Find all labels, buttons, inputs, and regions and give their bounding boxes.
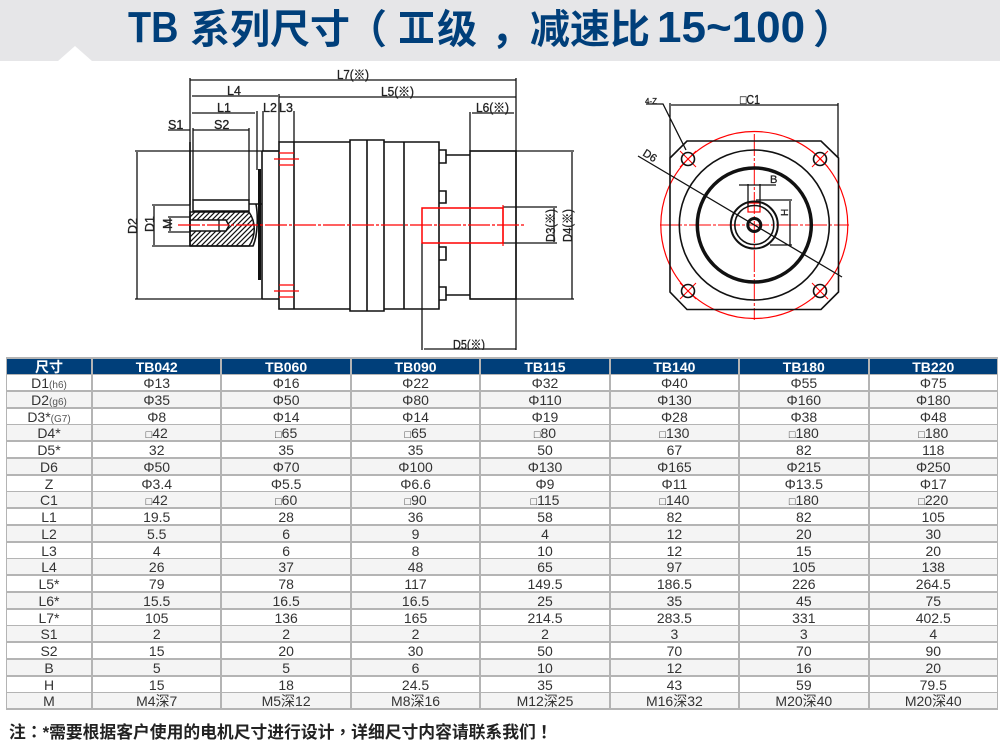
table header — [7, 358, 997, 374]
dimension labels: L3 — [279, 101, 293, 115]
row D3 — [7, 408, 997, 424]
row D5 — [7, 442, 997, 457]
technical drawings — [126, 68, 849, 350]
front dimension labels — [640, 93, 791, 216]
front dimension labels: H — [780, 209, 791, 216]
gearbox body — [190, 140, 516, 311]
title: TB — [128, 3, 178, 52]
front dimension labels: D6 — [640, 147, 659, 165]
title: 15~100 — [657, 3, 805, 52]
dimension labels: L5(※) — [381, 85, 414, 99]
dimension table — [6, 357, 998, 710]
row D6 — [7, 459, 997, 474]
dimension labels: L7(※) — [337, 68, 369, 82]
dimension lines — [135, 78, 574, 352]
dimension labels: L6(※) — [476, 101, 509, 115]
side view of gearbox — [126, 68, 575, 352]
row Z — [7, 476, 997, 491]
row L5 — [7, 576, 997, 591]
row B — [7, 660, 997, 675]
row D1 — [7, 375, 997, 390]
header band — [0, 0, 1000, 61]
dimension labels — [126, 68, 575, 352]
row S1 — [7, 626, 997, 641]
red bolt circle and centre lines — [660, 132, 849, 320]
dimension labels: D1 — [143, 216, 157, 232]
dimension labels: D4(※) — [561, 209, 575, 242]
row L3 — [7, 542, 997, 558]
dimension labels: D2 — [126, 218, 140, 234]
dimension labels: D3(※) — [544, 209, 558, 242]
row D2 — [7, 392, 997, 407]
dimension labels: L2 — [263, 101, 277, 115]
dimension labels: S2 — [214, 118, 229, 132]
row L2 — [7, 526, 997, 541]
row L1 — [7, 509, 997, 524]
red construction lines — [178, 153, 525, 297]
row C1 — [7, 492, 997, 507]
dimension labels: L1 — [217, 101, 231, 115]
row M — [7, 693, 997, 708]
dimension labels: S1 — [168, 118, 183, 132]
row D4 — [7, 425, 997, 440]
output shaft section — [189, 142, 255, 247]
row S2 — [7, 643, 997, 658]
dimension labels: L4 — [227, 84, 241, 98]
row L6 — [7, 593, 997, 608]
front dimension lines — [638, 103, 842, 277]
row H — [7, 676, 997, 692]
header notch — [58, 46, 92, 61]
dimension labels: M — [161, 219, 175, 229]
flange outline and bores — [670, 141, 838, 310]
front dimension labels: □C1 — [740, 93, 760, 107]
row L4 — [7, 559, 997, 574]
row L7 — [7, 610, 997, 625]
title — [128, 0, 853, 55]
front dimension labels: B — [770, 174, 777, 186]
footnote: 注：*需要根据客户使用的电机尺寸进行设计，详细尺寸内容请联系我们！ — [9, 723, 553, 742]
front view of gearbox — [638, 93, 849, 320]
front dimension labels: 4-Z — [645, 97, 657, 106]
